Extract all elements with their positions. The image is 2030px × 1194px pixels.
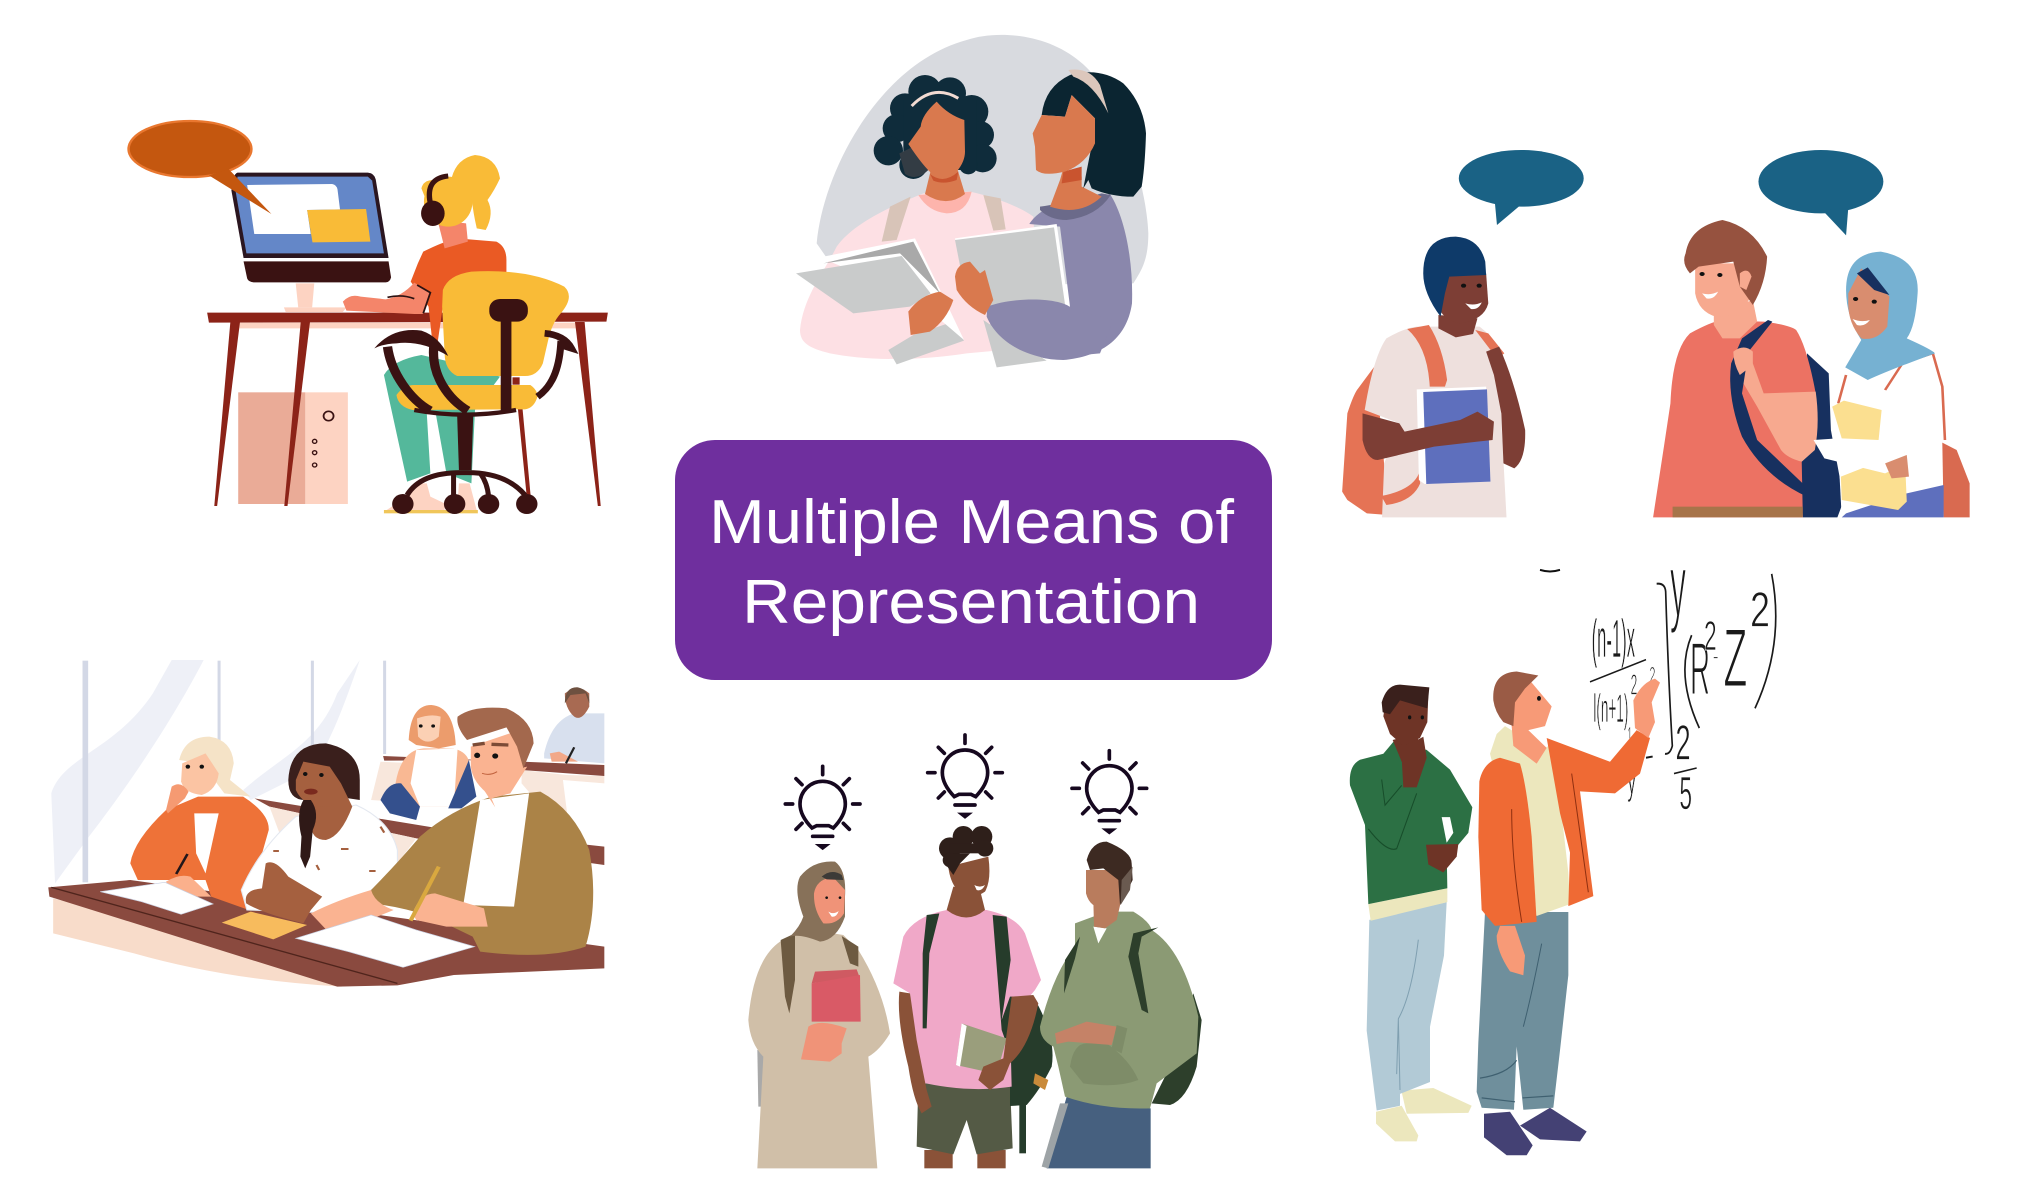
icon: light bulb right: [1072, 751, 1147, 834]
handwritten maths formula: 2: [1675, 715, 1691, 771]
title text: Representation: [742, 568, 1200, 637]
handwritten maths formula: l(n+1): [1593, 686, 1628, 731]
window and curtain background: [51, 660, 386, 883]
handwritten maths formula: 1: [1627, 722, 1632, 752]
speech bubble right: [1758, 150, 1883, 235]
icon: light bulb left: [785, 766, 860, 849]
illustration: students solving maths on board: [1350, 538, 1776, 1155]
handwritten maths formula: R: [1690, 626, 1710, 711]
blonde student: [100, 737, 269, 914]
handwritten maths formula: 2: [1631, 669, 1637, 701]
handwritten maths formula: y: [1670, 538, 1686, 635]
handwritten maths formula: y: [1627, 758, 1636, 802]
back right student: [544, 687, 604, 763]
student in pink shirt: [893, 826, 1053, 1168]
handwritten maths formula: [1540, 538, 1776, 820]
desk: [207, 313, 608, 506]
left woman: [800, 75, 1040, 359]
handwritten maths formula: Z: [1723, 612, 1747, 705]
illustration: students talking with speech bubbles: [1342, 150, 1970, 517]
back rows: [254, 756, 604, 865]
handwritten maths formula: 5: [1679, 768, 1692, 820]
back woman: [380, 705, 476, 820]
grey backdrop: [817, 35, 1148, 287]
illustration: three students with light bulb icons: [748, 735, 1202, 1168]
open notebook: [296, 915, 475, 967]
student in orange jacket: [1477, 672, 1660, 1155]
title box: [675, 440, 1272, 680]
student with backpack: [1653, 220, 1844, 517]
speech bubble: [129, 121, 271, 214]
dark haired student: [241, 743, 397, 923]
desk: [48, 880, 604, 987]
speech bubble left: [1459, 150, 1584, 225]
yellow book: [222, 912, 307, 939]
student in blue hijab: [1814, 252, 1970, 517]
student in hijab: [748, 862, 890, 1168]
illustration: two women with folders: [796, 35, 1148, 367]
student in green sweater: [1350, 685, 1472, 1141]
male student: [311, 708, 593, 955]
handwritten maths formula: (n-1)x: [1592, 609, 1635, 669]
handwritten maths formula: 2: [1649, 662, 1655, 689]
icon: light bulb middle: [928, 735, 1002, 818]
illustration: students in lecture hall: [48, 660, 604, 987]
handwritten maths formula: -: [1713, 645, 1719, 669]
seated woman: [343, 155, 506, 513]
illustration: student at computer desk: [129, 121, 608, 514]
monitor: [231, 173, 391, 312]
right folder and hand: [955, 224, 1113, 367]
title text: Multiple Means of: [709, 488, 1235, 557]
right woman: [987, 69, 1146, 360]
left folder: [796, 238, 964, 364]
student in green hoodie: [1040, 842, 1202, 1168]
handwritten maths formula: 2: [1704, 613, 1717, 660]
handwritten maths formula: 2: [1750, 582, 1770, 637]
computer tower: [238, 392, 348, 504]
office chair: [374, 271, 571, 514]
student with blue book: [1342, 237, 1525, 517]
